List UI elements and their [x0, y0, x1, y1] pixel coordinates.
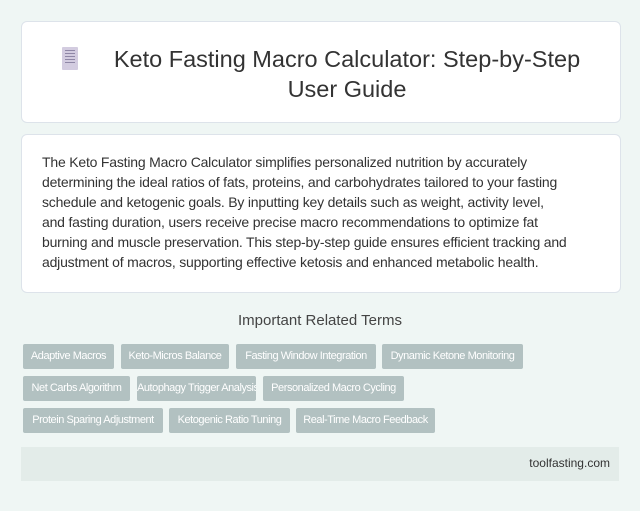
description text: determining the ideal ratios of fats, proteins, and carbohydrates tailored to your fasting [42, 174, 557, 190]
description text: schedule and ketogenic goals. By inputting key details such as weight, activity level, [42, 194, 544, 210]
tags: Adaptive Macros [31, 350, 106, 362]
tags: Personalized Macro Cycling [271, 382, 396, 394]
tags: Real-Time Macro Feedback [303, 414, 428, 426]
tags: Keto-Micros Balance [129, 350, 221, 362]
description text [42, 154, 566, 270]
title: Keto Fasting Macro Calculator: Step-by-Step User Guide [114, 46, 580, 102]
tags: Dynamic Ketone Monitoring [391, 350, 514, 362]
footer source text: toolfasting.com [529, 456, 610, 470]
description card [21, 134, 621, 293]
tags: Autophagy Trigger Analysis [137, 382, 256, 394]
tags: Net Carbs Algorithm [32, 382, 121, 394]
description text: burning and muscle preservation. This step-by-step guide ensures efficient tracking and [42, 234, 566, 250]
description text: and fasting duration, users receive precise macro recommendations to optimize fat [42, 214, 538, 230]
header card [21, 21, 621, 123]
tags: Protein Sparing Adjustment [32, 414, 154, 426]
description text: The Keto Fasting Macro Calculator simplifies personalized nutrition by accurately [42, 154, 527, 170]
description text: adjustment of macros, supporting effective ketosis and enhanced metabolic health. [42, 254, 538, 270]
icon: document [62, 47, 78, 70]
tags: Fasting Window Integration [245, 350, 367, 362]
tags: Ketogenic Ratio Tuning [178, 414, 281, 426]
related terms heading: Important Related Terms [238, 312, 402, 329]
footer [21, 447, 619, 481]
